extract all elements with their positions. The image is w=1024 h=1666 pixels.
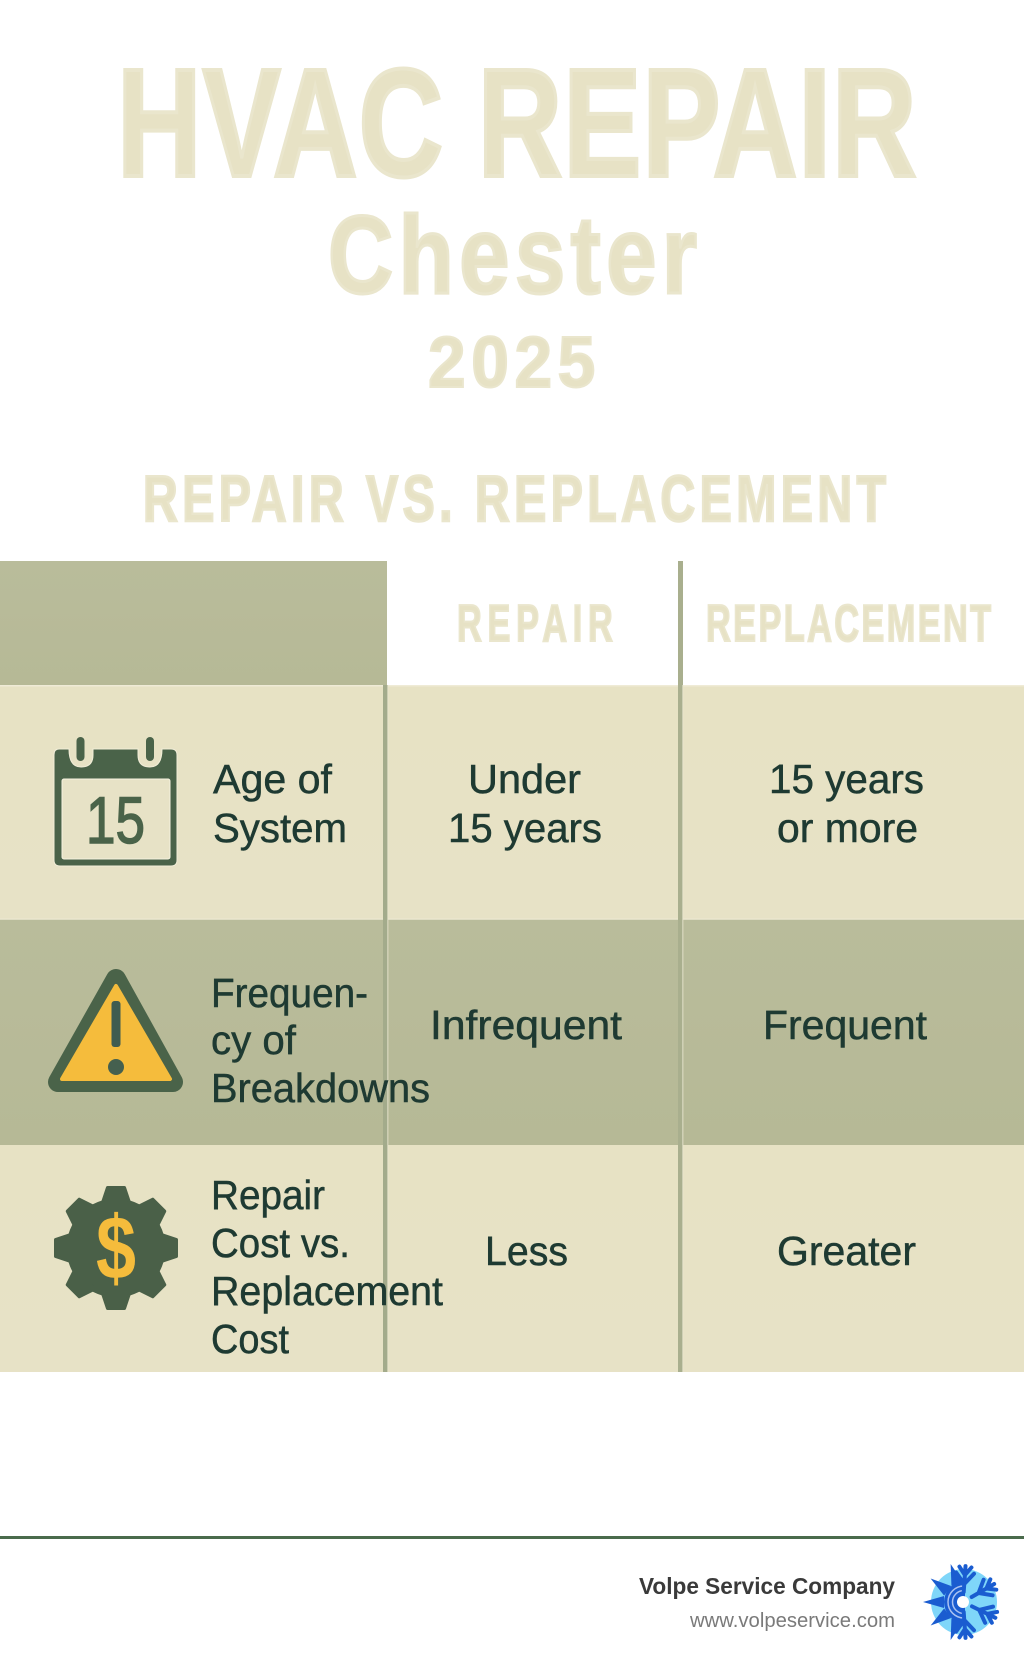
label: repair cost vs replacement cost: Replacement [211,1268,444,1314]
subtitle: Chester: Chester [328,195,697,317]
label: repair cost vs replacement cost: Cost vs. [211,1220,350,1266]
icon: calendar 15 [54,737,177,866]
label: frequency of breakdowns: cy of [211,1017,297,1063]
label: repair cost vs replacement cost: Repair [211,1172,325,1218]
cell: 15 years or more: 15 years [769,756,924,802]
cell: frequent: Frequent [763,1002,928,1048]
cell: under 15 years: Under [468,756,581,802]
cell: under 15 years [448,756,602,851]
cell: 15 years or more [769,756,924,851]
label: repair cost vs replacement cost [211,1172,444,1362]
icon: gear with dollar [56,1188,176,1308]
cell: less: Less [485,1228,568,1274]
cell: greater: Greater [777,1228,916,1274]
label: age of system: Age of [213,756,333,802]
icon: snowflake sun logo [923,1562,999,1642]
comparison table [0,561,1024,1372]
row band: age of system [0,685,1024,919]
label: frequency of breakdowns: Frequen- [211,970,368,1016]
icon: warning triangle [58,979,173,1082]
icon: gear with dollar: $ [96,1199,136,1299]
title: HVAC REPAIR: HVAC REPAIR [117,36,917,209]
row band: cost [0,1145,1024,1372]
label: frequency of breakdowns: Breakdowns [211,1065,430,1111]
label: repair cost vs replacement cost: Cost [211,1316,290,1362]
icon: calendar 15: 15 [86,783,145,857]
label: frequency of breakdowns [211,970,430,1111]
row band: frequency of breakdowns [0,919,1024,1145]
column header: repair: REPAIR [457,595,613,653]
footer: company name: Volpe Service Company [639,1573,895,1599]
footer rule [0,1536,1024,1539]
heading: repair vs replacement: REPAIR VS. REPLACEMENT [143,463,886,536]
footer: website: www.volpeservice.com [689,1610,895,1632]
cell: infrequent: Infrequent [430,1002,623,1048]
label: age of system [213,756,347,851]
cell: 15 years or more: or more [777,805,918,851]
year: 2025: 2025 [428,322,595,402]
table header blank cell [0,561,387,685]
label: age of system: System [213,805,347,851]
column header: replacement: REPLACEMENT [706,595,991,653]
cell: under 15 years: 15 years [448,805,602,851]
